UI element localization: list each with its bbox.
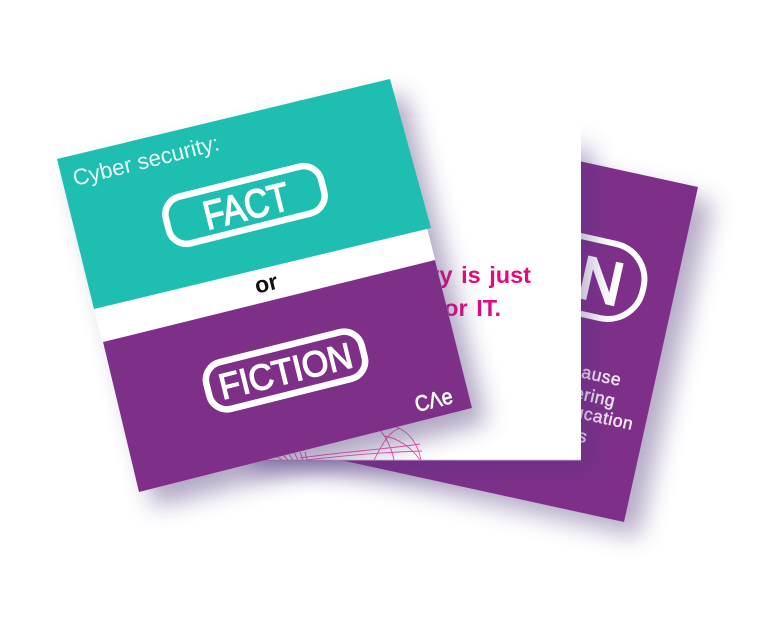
fiction badge: FICTION — [215, 335, 357, 407]
back card answer text — [443, 342, 635, 447]
back card pill badge: FICTION — [381, 201, 630, 318]
fact badge: FACT — [199, 175, 294, 239]
teal fact section — [57, 79, 431, 309]
CAE logo: CΛe — [412, 383, 455, 417]
purple fiction section — [103, 260, 472, 492]
heading: cyber security: Cyber security: — [70, 130, 222, 191]
fact badge — [162, 162, 328, 248]
or label: or — [252, 268, 280, 299]
back card answer text: social engineering — [465, 358, 617, 411]
panel: middle white card — [240, 117, 593, 472]
back card answer text: for staff members — [443, 396, 589, 447]
back card answer text: Fiction because — [491, 342, 623, 390]
middle card statement — [287, 262, 531, 321]
panel: back purple card — [226, 100, 713, 537]
middle card statement: a matter for IT. — [334, 295, 501, 321]
back card answer text: needs user education — [456, 375, 635, 434]
panel: front fact or fiction card — [57, 79, 487, 507]
decorative pink line pattern — [276, 427, 422, 460]
middle card statement: Cyber security is just — [287, 262, 531, 288]
